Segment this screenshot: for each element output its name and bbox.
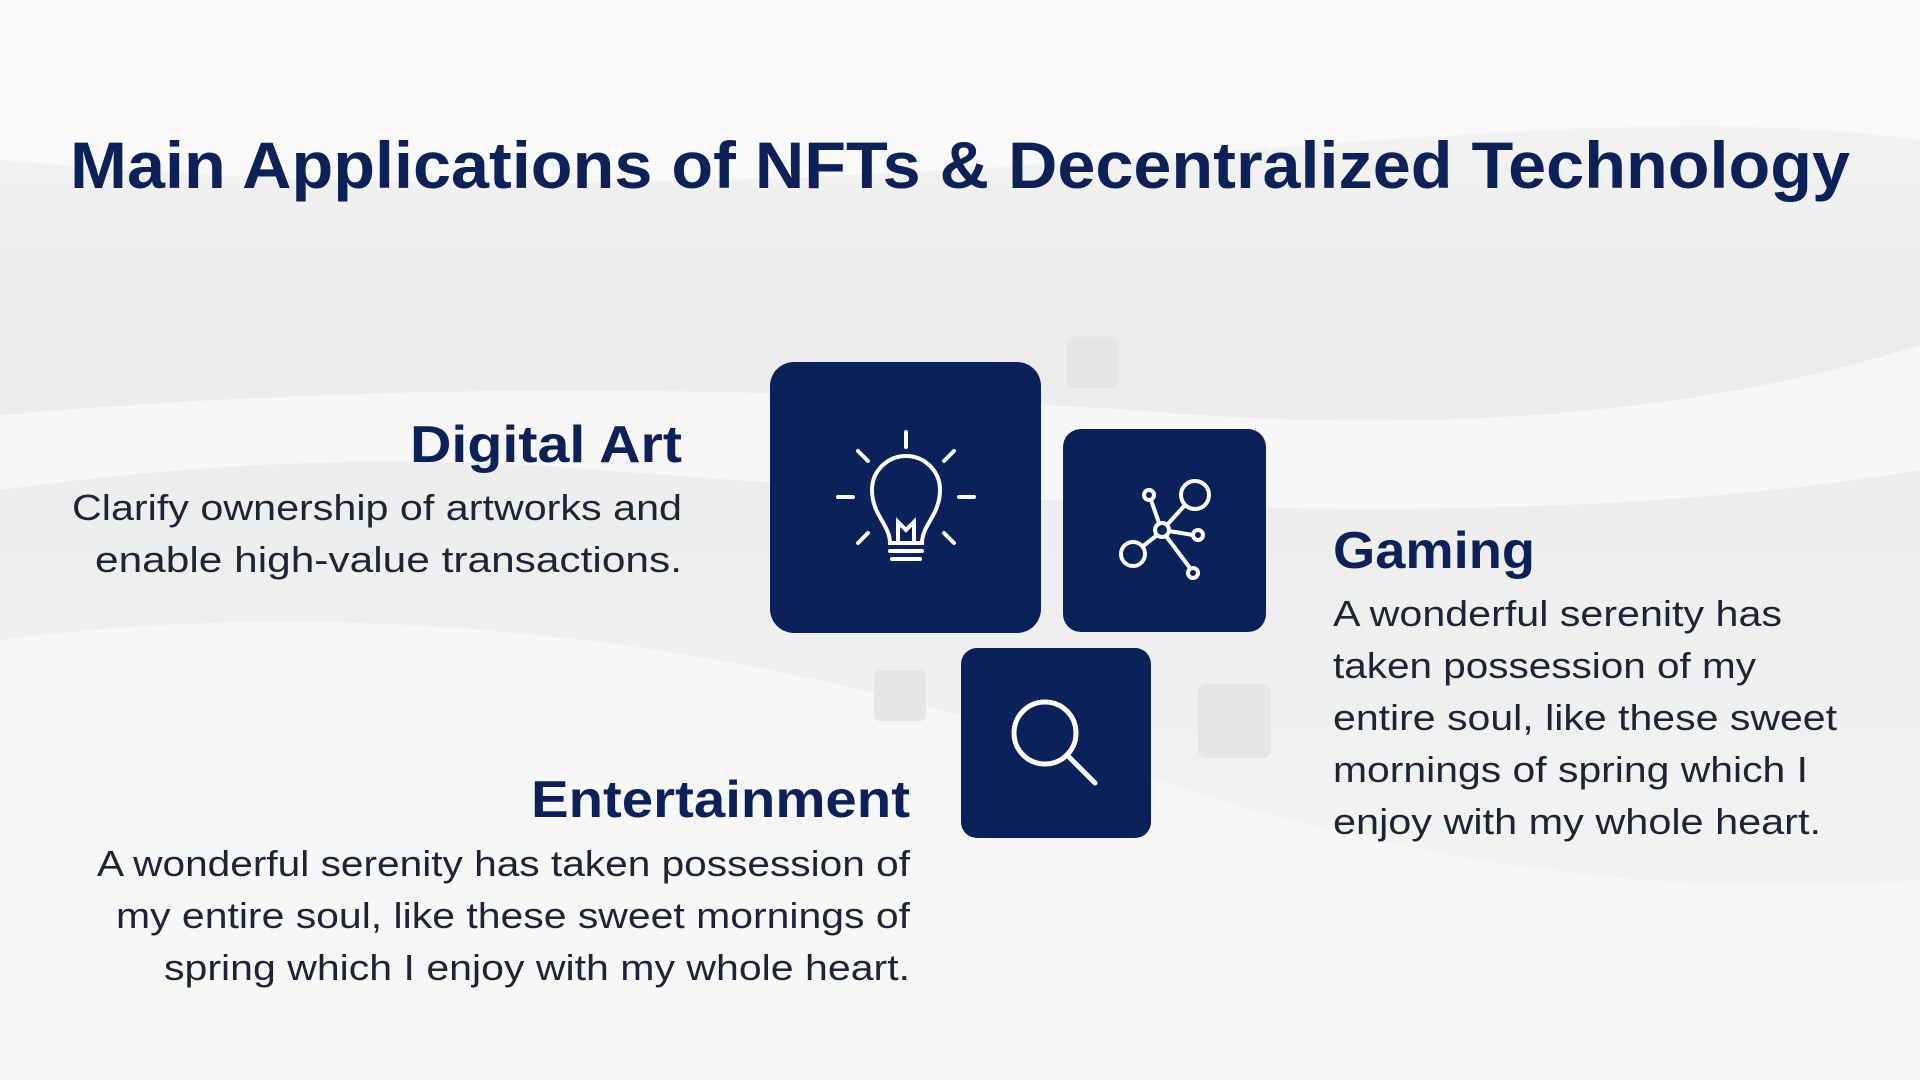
text block: Gaming: enjoy with my whole heart. [1333, 801, 1821, 842]
text block: Entertainment [97, 771, 911, 988]
text block: Digital Art [72, 416, 682, 580]
text block: Gaming: entire soul, like these sweet [1333, 697, 1837, 738]
text block: Gaming: mornings of spring which I [1333, 749, 1808, 790]
title: Main Applications of NFTs & Decentralized Technology [70, 128, 1850, 202]
text block: Gaming: A wonderful serenity has [1333, 593, 1782, 634]
text block: Digital Art: enable high-value transactions. [95, 539, 682, 580]
decorative light squares [874, 337, 1271, 758]
text block: Entertainment: spring which I enjoy with my whole heart. [164, 947, 910, 988]
icon: lightbulb [838, 432, 974, 559]
text block: Gaming: Gaming [1333, 522, 1535, 580]
icon: magnifier [1014, 702, 1095, 783]
text block: Gaming: taken possession of my [1333, 645, 1756, 686]
text block: Digital Art: Digital Art [410, 416, 682, 474]
text block: Entertainment: Entertainment [531, 771, 910, 829]
text block: Entertainment: my entire soul, like these sweet mornings of [116, 895, 911, 936]
text block: Digital Art: Clarify ownership of artworks and [72, 487, 682, 528]
icon box: search [961, 648, 1151, 838]
icon: network [1121, 481, 1209, 578]
icon box: network [1063, 429, 1266, 632]
text block: Entertainment: A wonderful serenity has taken possession of [97, 843, 911, 884]
text block: Gaming [1333, 522, 1837, 842]
icon box: lightbulb [770, 362, 1041, 633]
